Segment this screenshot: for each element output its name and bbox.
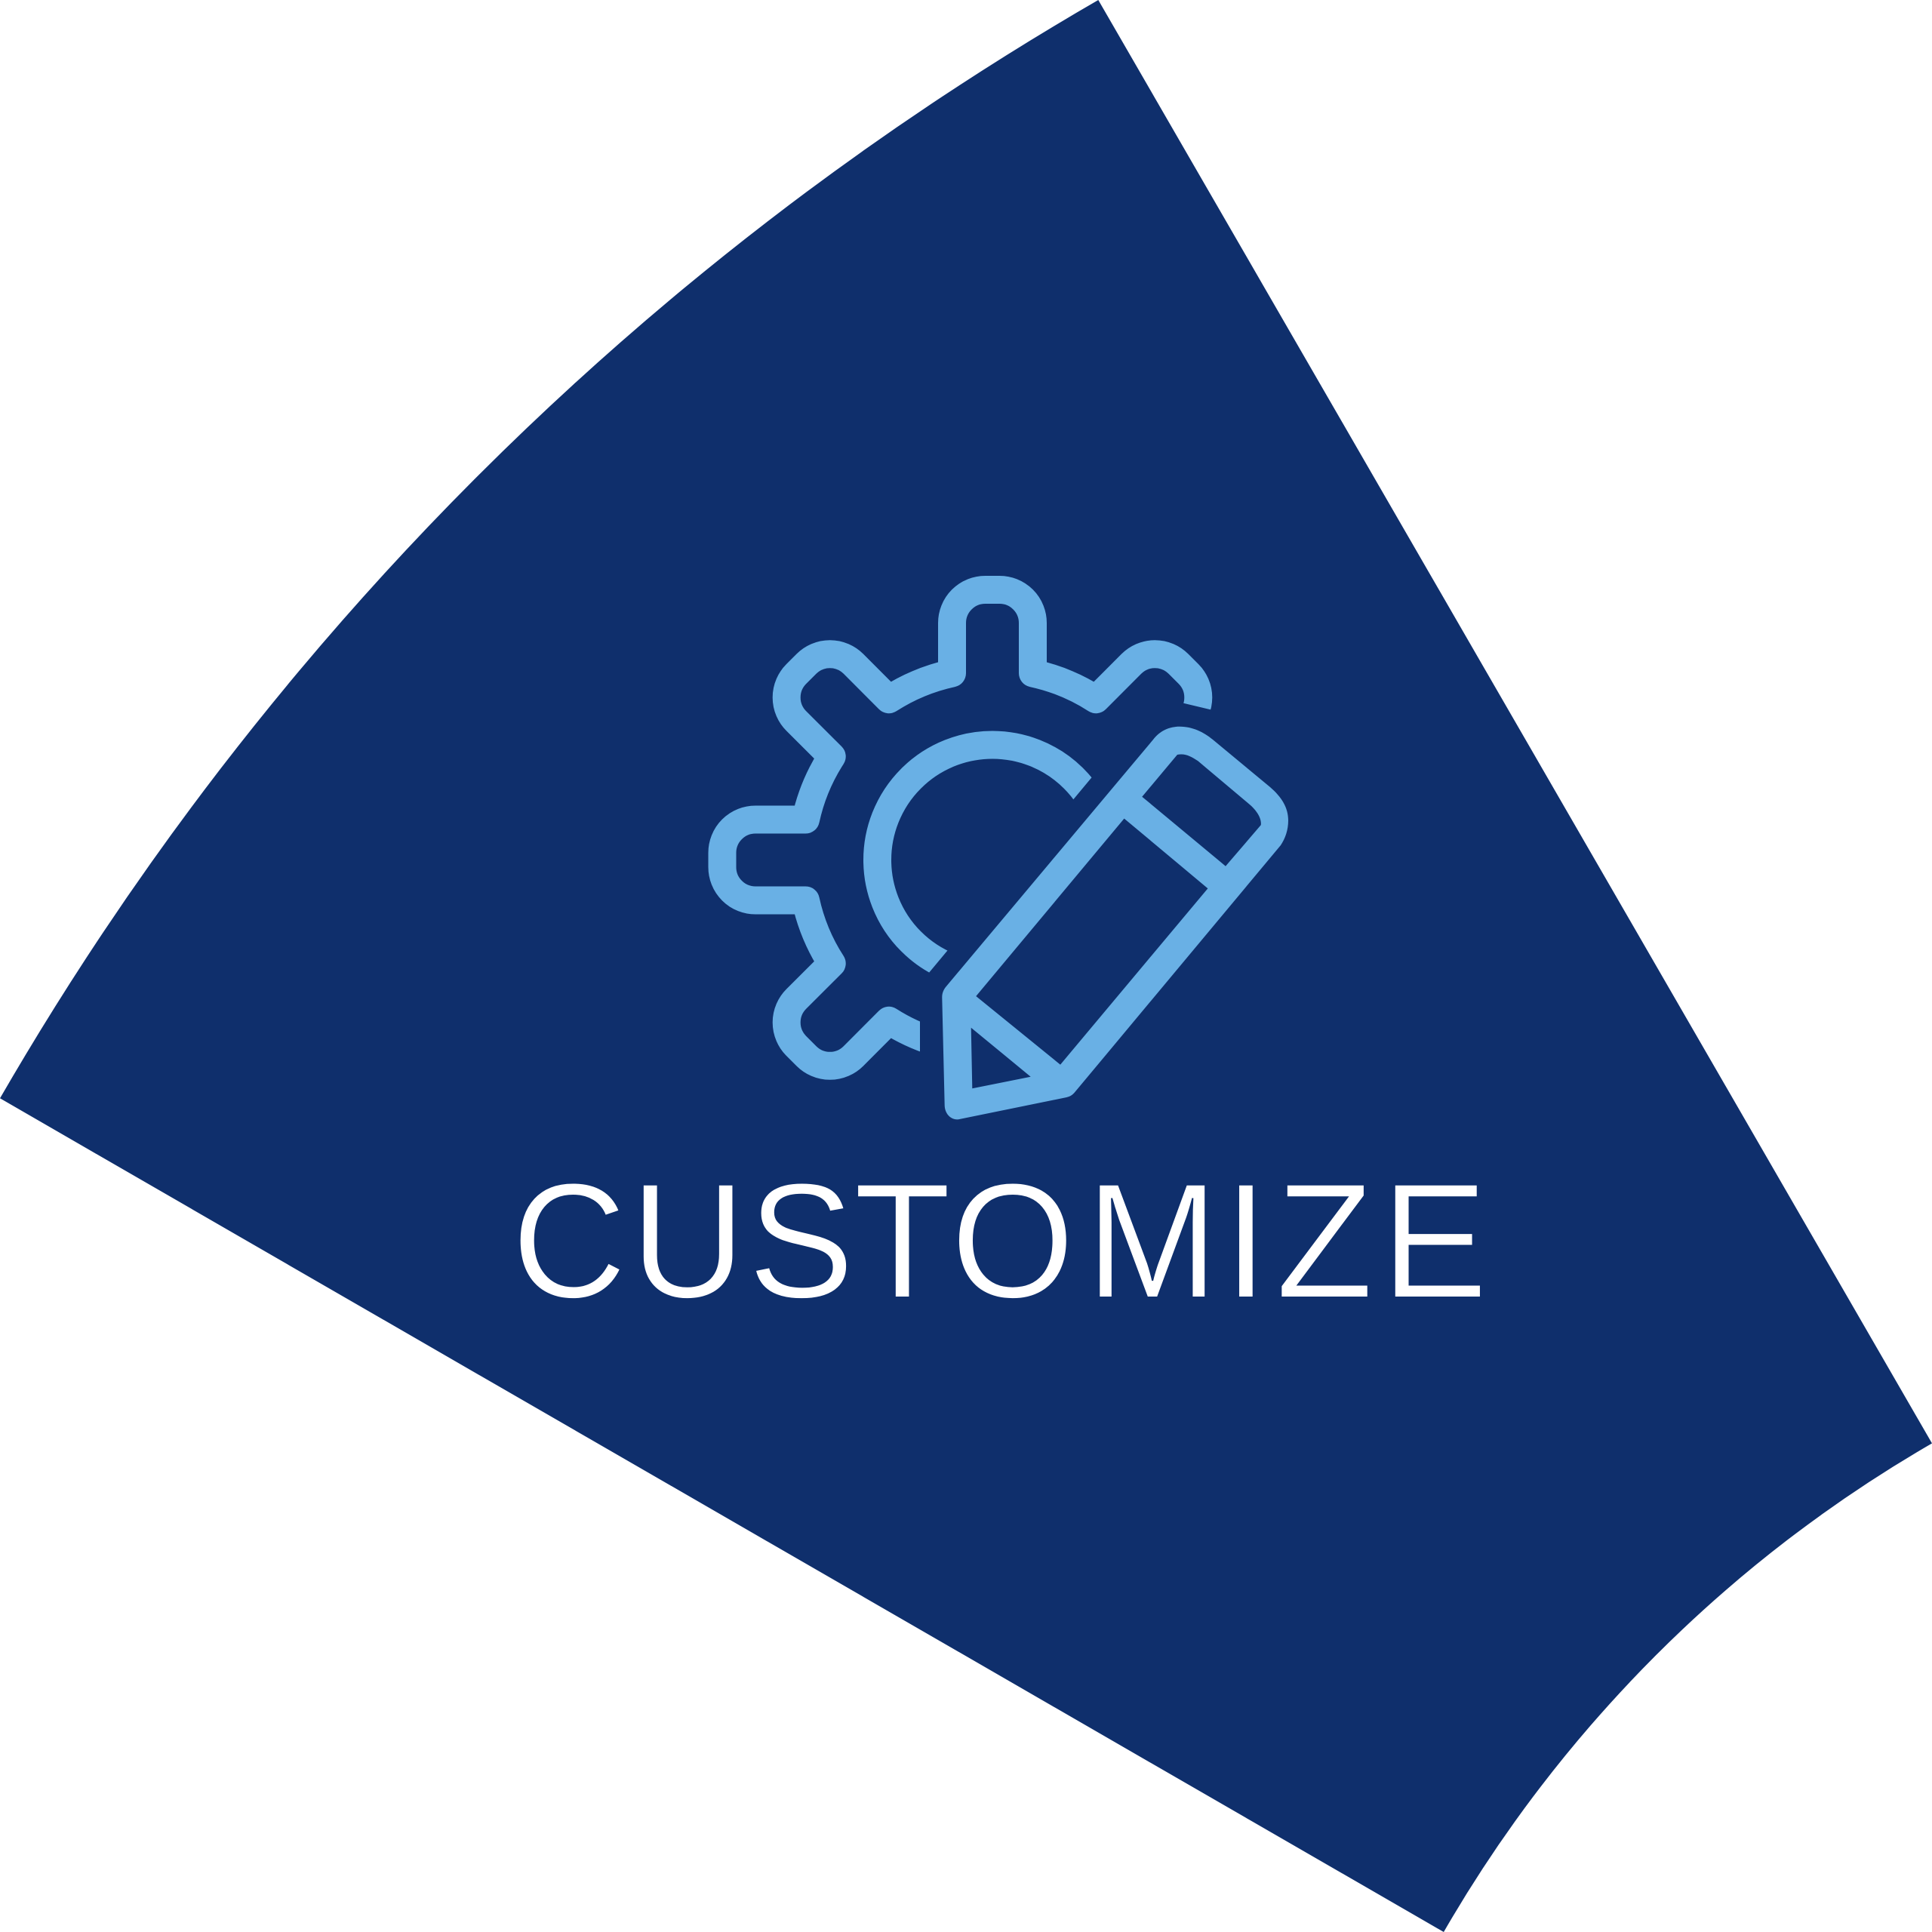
icon: gear outline (722, 590, 1198, 1066)
icon: gear inner ring (877, 745, 1108, 975)
icon: pencil (942, 727, 1288, 1119)
title: CUSTOMIZE (512, 1149, 1487, 1333)
icon: gear with pencil (722, 590, 1288, 1119)
